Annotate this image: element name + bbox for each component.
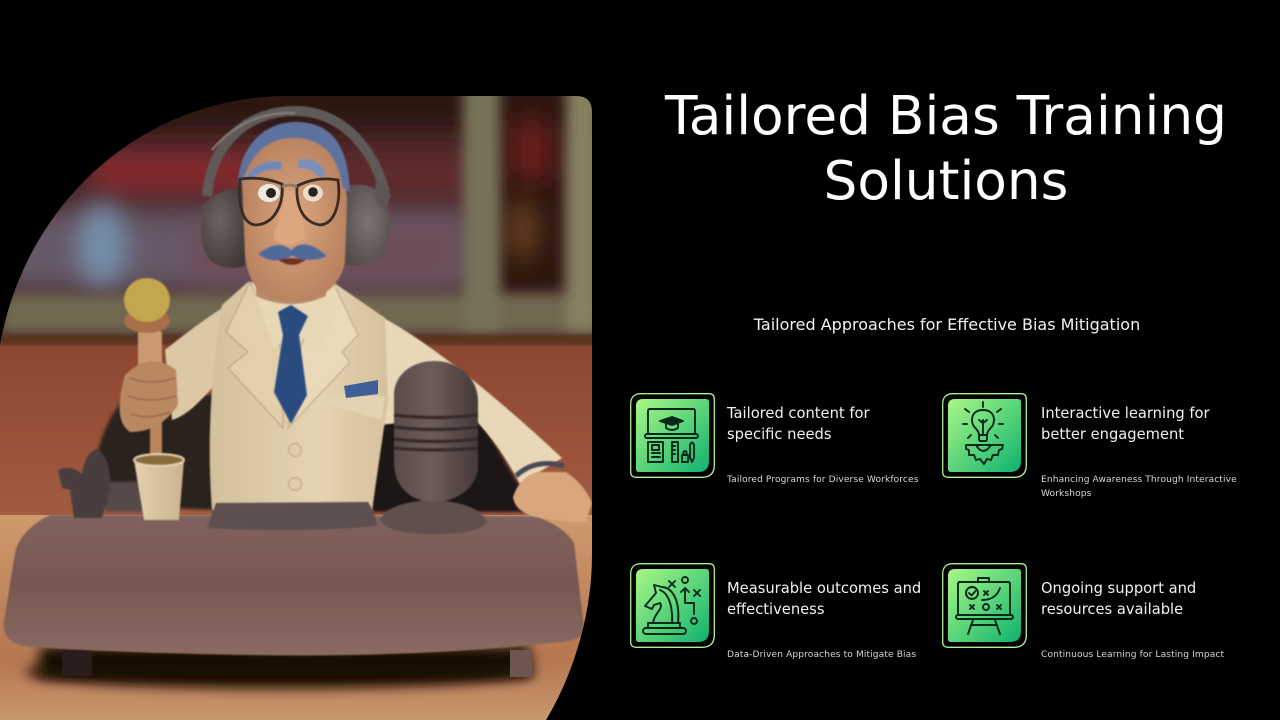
icon: strategy whiteboard <box>942 563 1027 648</box>
card heading: specific needs <box>727 426 832 443</box>
illustration: clay man with headphones at desk <box>0 96 592 720</box>
card heading: effectiveness <box>727 601 824 618</box>
jacket <box>210 280 388 510</box>
card heading <box>727 580 921 618</box>
table top block <box>4 515 584 655</box>
card heading: Interactive learning for <box>1041 405 1210 422</box>
card heading: Tailored content for <box>727 405 870 422</box>
notepad <box>207 502 377 530</box>
wooden tabletop <box>0 515 600 720</box>
neck <box>255 286 327 305</box>
card heading <box>726 405 870 443</box>
figure's raised arm <box>164 308 222 421</box>
figure's extended arm <box>380 316 562 484</box>
card heading <box>1041 580 1196 618</box>
card heading: Ongoing support and <box>1041 580 1196 597</box>
subtitle: Tailored Approaches for Effective Bias Mitigation <box>754 315 1140 334</box>
pocket square <box>344 380 378 398</box>
card caption: Data-Driven Approaches to Mitigate Bias <box>727 650 916 660</box>
head <box>238 122 350 301</box>
title <box>664 85 1227 212</box>
headphones <box>201 111 391 268</box>
clay cup <box>134 454 184 520</box>
hand-held microphone prop <box>120 278 178 462</box>
icon: laptop with graduation cap <box>630 393 715 478</box>
card heading: Measurable outcomes and <box>727 580 921 597</box>
icon: chess knight strategy <box>630 563 715 648</box>
blurred background: shelves and wall <box>0 80 600 520</box>
table legs <box>62 650 532 677</box>
card heading: resources available <box>1041 601 1183 618</box>
card caption: Tailored Programs for Diverse Workforces <box>727 475 919 485</box>
title: Solutions <box>824 150 1068 212</box>
dark chair behind figure <box>92 392 526 512</box>
card heading: better engagement <box>1041 426 1184 443</box>
card caption: Enhancing Awareness Through Interactive Workshops <box>1041 475 1237 499</box>
eyes <box>258 184 323 202</box>
hand on table <box>513 464 592 522</box>
glasses <box>239 178 339 225</box>
card caption: Continuous Learning for Lasting Impact <box>1041 650 1224 660</box>
tie <box>274 305 308 424</box>
title: Tailored Bias Training <box>665 85 1227 147</box>
icon: light bulb and gear <box>942 393 1027 478</box>
clay lump hand <box>58 449 110 518</box>
card heading <box>1041 405 1210 443</box>
studio microphone <box>380 361 487 534</box>
